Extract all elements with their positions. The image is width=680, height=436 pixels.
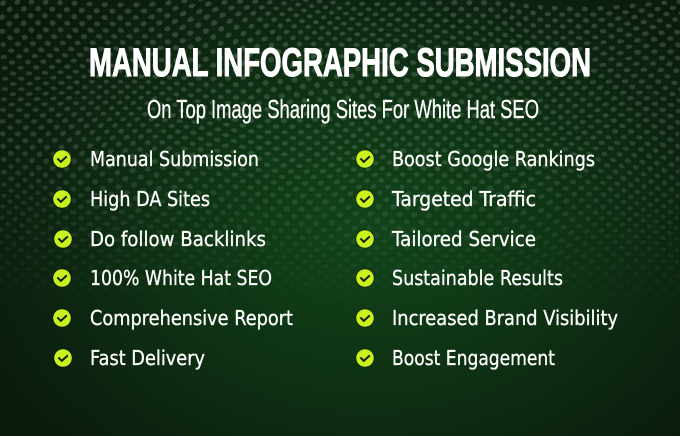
item: Increased Brand Visibility: Increased Brand Visibility [392, 306, 618, 330]
item: Manual Submission: Manual Submission [90, 147, 259, 171]
item: 100% White Hat SEO: 100% White Hat SEO [90, 266, 272, 290]
item: High DA Sites: High DA Sites [90, 187, 210, 211]
item: Boost Google Rankings: Boost Google Rankings [392, 147, 595, 171]
left feature list [52, 147, 293, 370]
right feature list [356, 147, 618, 370]
item: Targeted Traffic: Targeted Traffic [391, 187, 536, 211]
item: Do follow Backlinks: Do follow Backlinks [90, 227, 266, 251]
item: Sustainable Results: Sustainable Results [392, 266, 563, 290]
item: Fast Delivery [54, 346, 205, 370]
item: Fast Delivery: Fast Delivery [90, 346, 205, 370]
item: Comprehensive Report: Comprehensive Report [90, 306, 293, 330]
item: High DA Sites [52, 187, 210, 211]
item: Tailored Service: Tailored Service [391, 227, 536, 251]
item: Boost Engagement: Boost Engagement [392, 346, 555, 370]
